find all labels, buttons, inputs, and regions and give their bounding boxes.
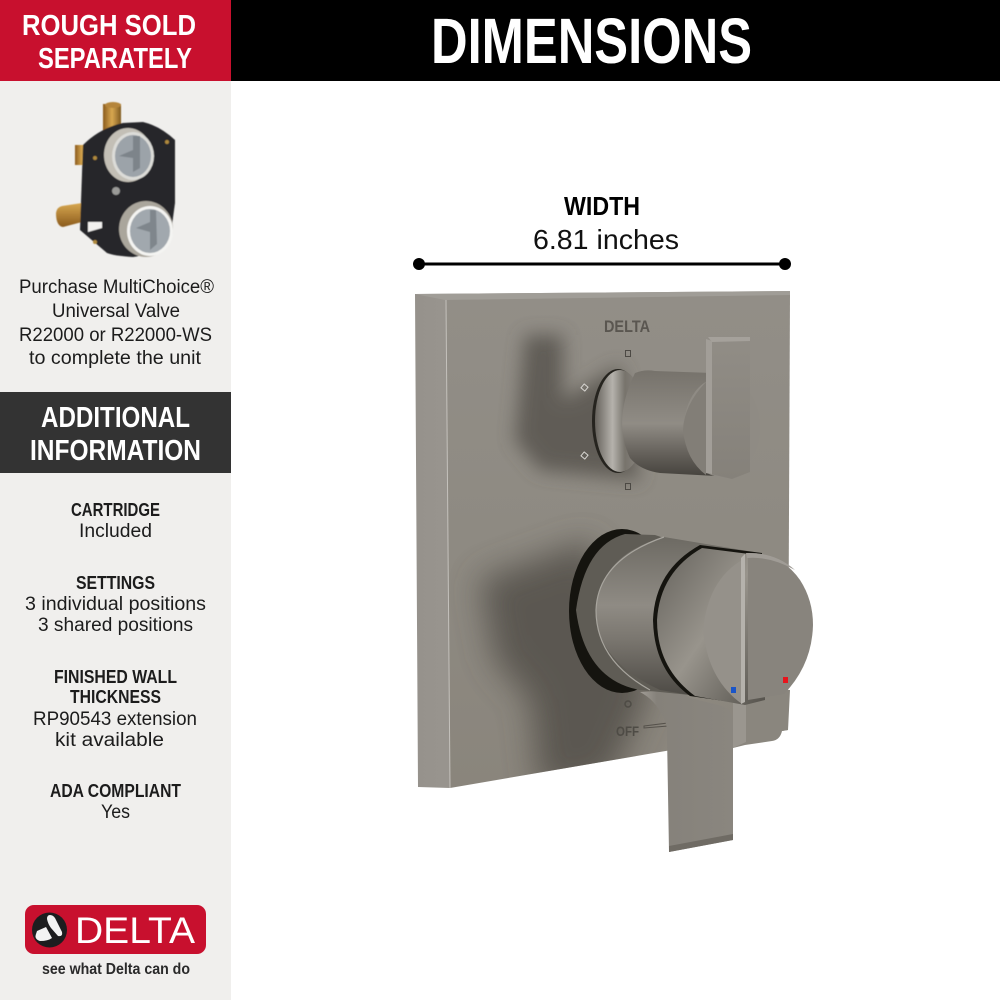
image: shower valve trim <box>415 291 813 852</box>
text: finished wall thickness: FINISHED WALL <box>54 667 177 687</box>
heading: additional information: ADDITIONAL <box>41 402 190 434</box>
text: ada compliant: Yes <box>101 802 130 823</box>
logo: delta: see what Delta can do <box>42 961 190 978</box>
text: ada compliant: ADA COMPLIANT <box>50 781 181 801</box>
text: ada compliant <box>50 781 181 823</box>
logo: delta <box>25 905 206 978</box>
text: finished wall thickness: kit available <box>55 730 164 751</box>
text: finished wall thickness: THICKNESS <box>70 687 161 707</box>
banner: rough sold separately: ROUGH SOLD <box>22 10 196 42</box>
banner: rough sold separately <box>0 0 231 81</box>
panel: left sidebar <box>0 0 231 1000</box>
text: cartridge <box>71 500 160 542</box>
small diverter knob <box>592 336 760 479</box>
text: purchase note <box>19 277 214 369</box>
off label: OFF <box>616 724 639 739</box>
image: rough-in valve <box>56 102 175 257</box>
text: purchase note: Purchase MultiChoice® <box>19 277 214 298</box>
text: finished wall thickness: RP90543 extension <box>33 709 197 730</box>
position markers <box>581 350 630 490</box>
off label <box>616 701 668 739</box>
text: settings: 3 shared positions <box>38 615 193 636</box>
engraved logo: DELTA <box>604 317 650 336</box>
text: settings: 3 individual positions <box>25 594 206 615</box>
title: dimensions <box>231 0 1000 81</box>
dimension: width: 6.81 inches <box>533 224 679 255</box>
text: settings <box>25 573 206 636</box>
text: purchase note: R22000 or R22000-WS <box>19 325 212 346</box>
banner: rough sold separately: SEPARATELY <box>38 43 192 75</box>
dimension: width <box>413 191 791 270</box>
text: cartridge: Included <box>79 521 152 542</box>
lever handle <box>640 690 733 852</box>
dimension: width: WIDTH <box>564 191 640 221</box>
text: purchase note: Universal Valve <box>52 301 180 322</box>
text: cartridge: CARTRIDGE <box>71 500 160 520</box>
plate <box>415 291 790 790</box>
large mixing knob <box>569 529 813 705</box>
large handle base piece <box>733 690 790 748</box>
heading: additional information: INFORMATION <box>30 435 201 467</box>
logo: delta: DELTA <box>75 910 195 951</box>
text: settings: SETTINGS <box>76 573 155 593</box>
heading: additional information <box>0 392 231 473</box>
title: dimensions: DIMENSIONS <box>431 5 752 77</box>
text: finished wall thickness <box>33 667 197 751</box>
text: purchase note: to complete the unit <box>29 348 202 369</box>
